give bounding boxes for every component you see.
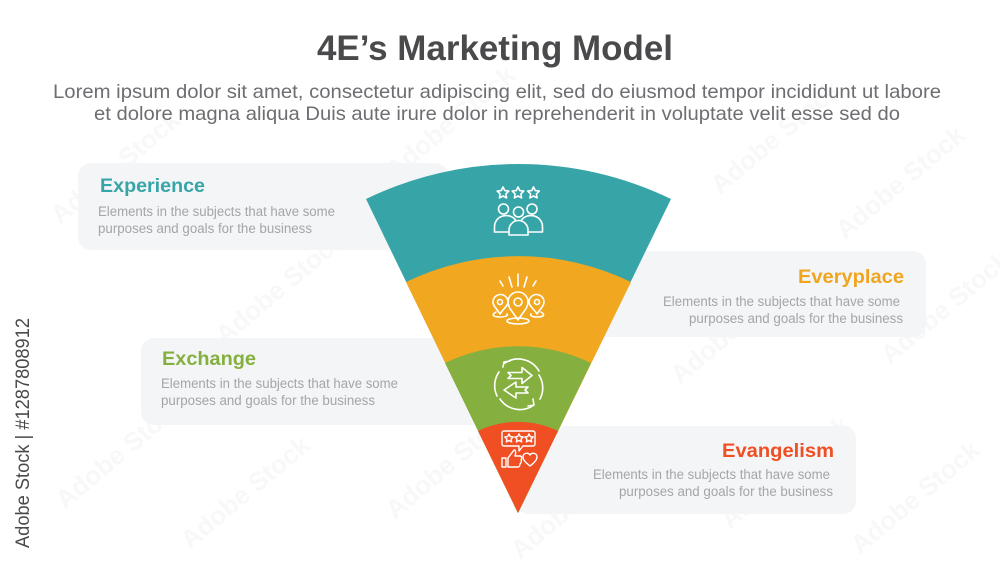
watermark pattern: Adobe Stock bbox=[50, 389, 191, 515]
icon: people with stars bbox=[494, 187, 542, 235]
subtitle: Lorem ipsum dolor sit amet, consectetur adipiscing elit, sed do eiusmod tempor incididunt ut labore bbox=[53, 81, 941, 103]
title: 4E’s Marketing Model bbox=[317, 29, 673, 68]
watermark pattern: Adobe Stock bbox=[380, 59, 521, 185]
panel: Exchange bbox=[141, 338, 491, 425]
icon: review stars, thumbs up, heart bbox=[502, 431, 537, 467]
subtitle: et dolore magna aliqua Duis aute irure dolor in reprehenderit in voluptate velit esse sed do bbox=[94, 103, 900, 125]
text: Exchange description: purposes and goals for the business bbox=[161, 393, 375, 408]
text: Experience description bbox=[98, 204, 335, 236]
text: Experience description: Elements in the subjects that have some bbox=[98, 204, 335, 219]
watermark pattern: Adobe Stock bbox=[665, 264, 806, 390]
segment: orange bbox=[406, 256, 631, 513]
text: Everyplace description: purposes and goals for the business bbox=[689, 311, 903, 326]
segment: green bbox=[445, 346, 591, 513]
text: Everyplace description: Elements in the subjects that have some bbox=[663, 294, 900, 309]
heading: Evangelism: Evangelism bbox=[722, 440, 834, 462]
text: Evangelism description: Elements in the subjects that have some bbox=[593, 467, 830, 482]
text: Everyplace description bbox=[663, 294, 903, 326]
watermark pattern: Adobe Stock bbox=[705, 74, 846, 200]
watermark pattern: Adobe Stock bbox=[210, 224, 351, 350]
subtitle bbox=[53, 81, 941, 125]
icon: exchange arrows bbox=[495, 359, 543, 410]
panel: Experience bbox=[78, 163, 448, 250]
watermark credit: Adobe Stock | #1287808912 bbox=[13, 318, 34, 548]
panel: Everyplace bbox=[590, 251, 926, 337]
watermark pattern: Adobe Stock bbox=[380, 399, 521, 525]
watermark pattern: Adobe Stock bbox=[505, 439, 646, 563]
text: Exchange description: Elements in the subjects that have some bbox=[161, 376, 398, 391]
heading: Exchange: Exchange bbox=[162, 348, 256, 370]
icon: location pins bbox=[493, 274, 544, 324]
segment: red bbox=[478, 422, 558, 513]
text: Experience description: purposes and goals for the business bbox=[98, 221, 312, 236]
watermark pattern: Adobe Stock bbox=[45, 104, 186, 230]
funnel chart bbox=[366, 164, 671, 513]
text: Evangelism description: purposes and goals for the business bbox=[619, 484, 833, 499]
text: Evangelism description bbox=[593, 467, 833, 499]
segment: teal bbox=[366, 164, 671, 513]
watermark pattern: Adobe Stock bbox=[175, 429, 316, 555]
text: Exchange description bbox=[161, 376, 398, 408]
heading: Everyplace: Everyplace bbox=[798, 266, 904, 288]
panel: Evangelism bbox=[516, 426, 856, 514]
watermark pattern: Adobe Stock bbox=[845, 434, 986, 560]
heading: Experience: Experience bbox=[100, 175, 205, 197]
watermark pattern: Adobe Stock bbox=[830, 119, 971, 245]
watermark pattern: Adobe Stock bbox=[715, 409, 856, 535]
